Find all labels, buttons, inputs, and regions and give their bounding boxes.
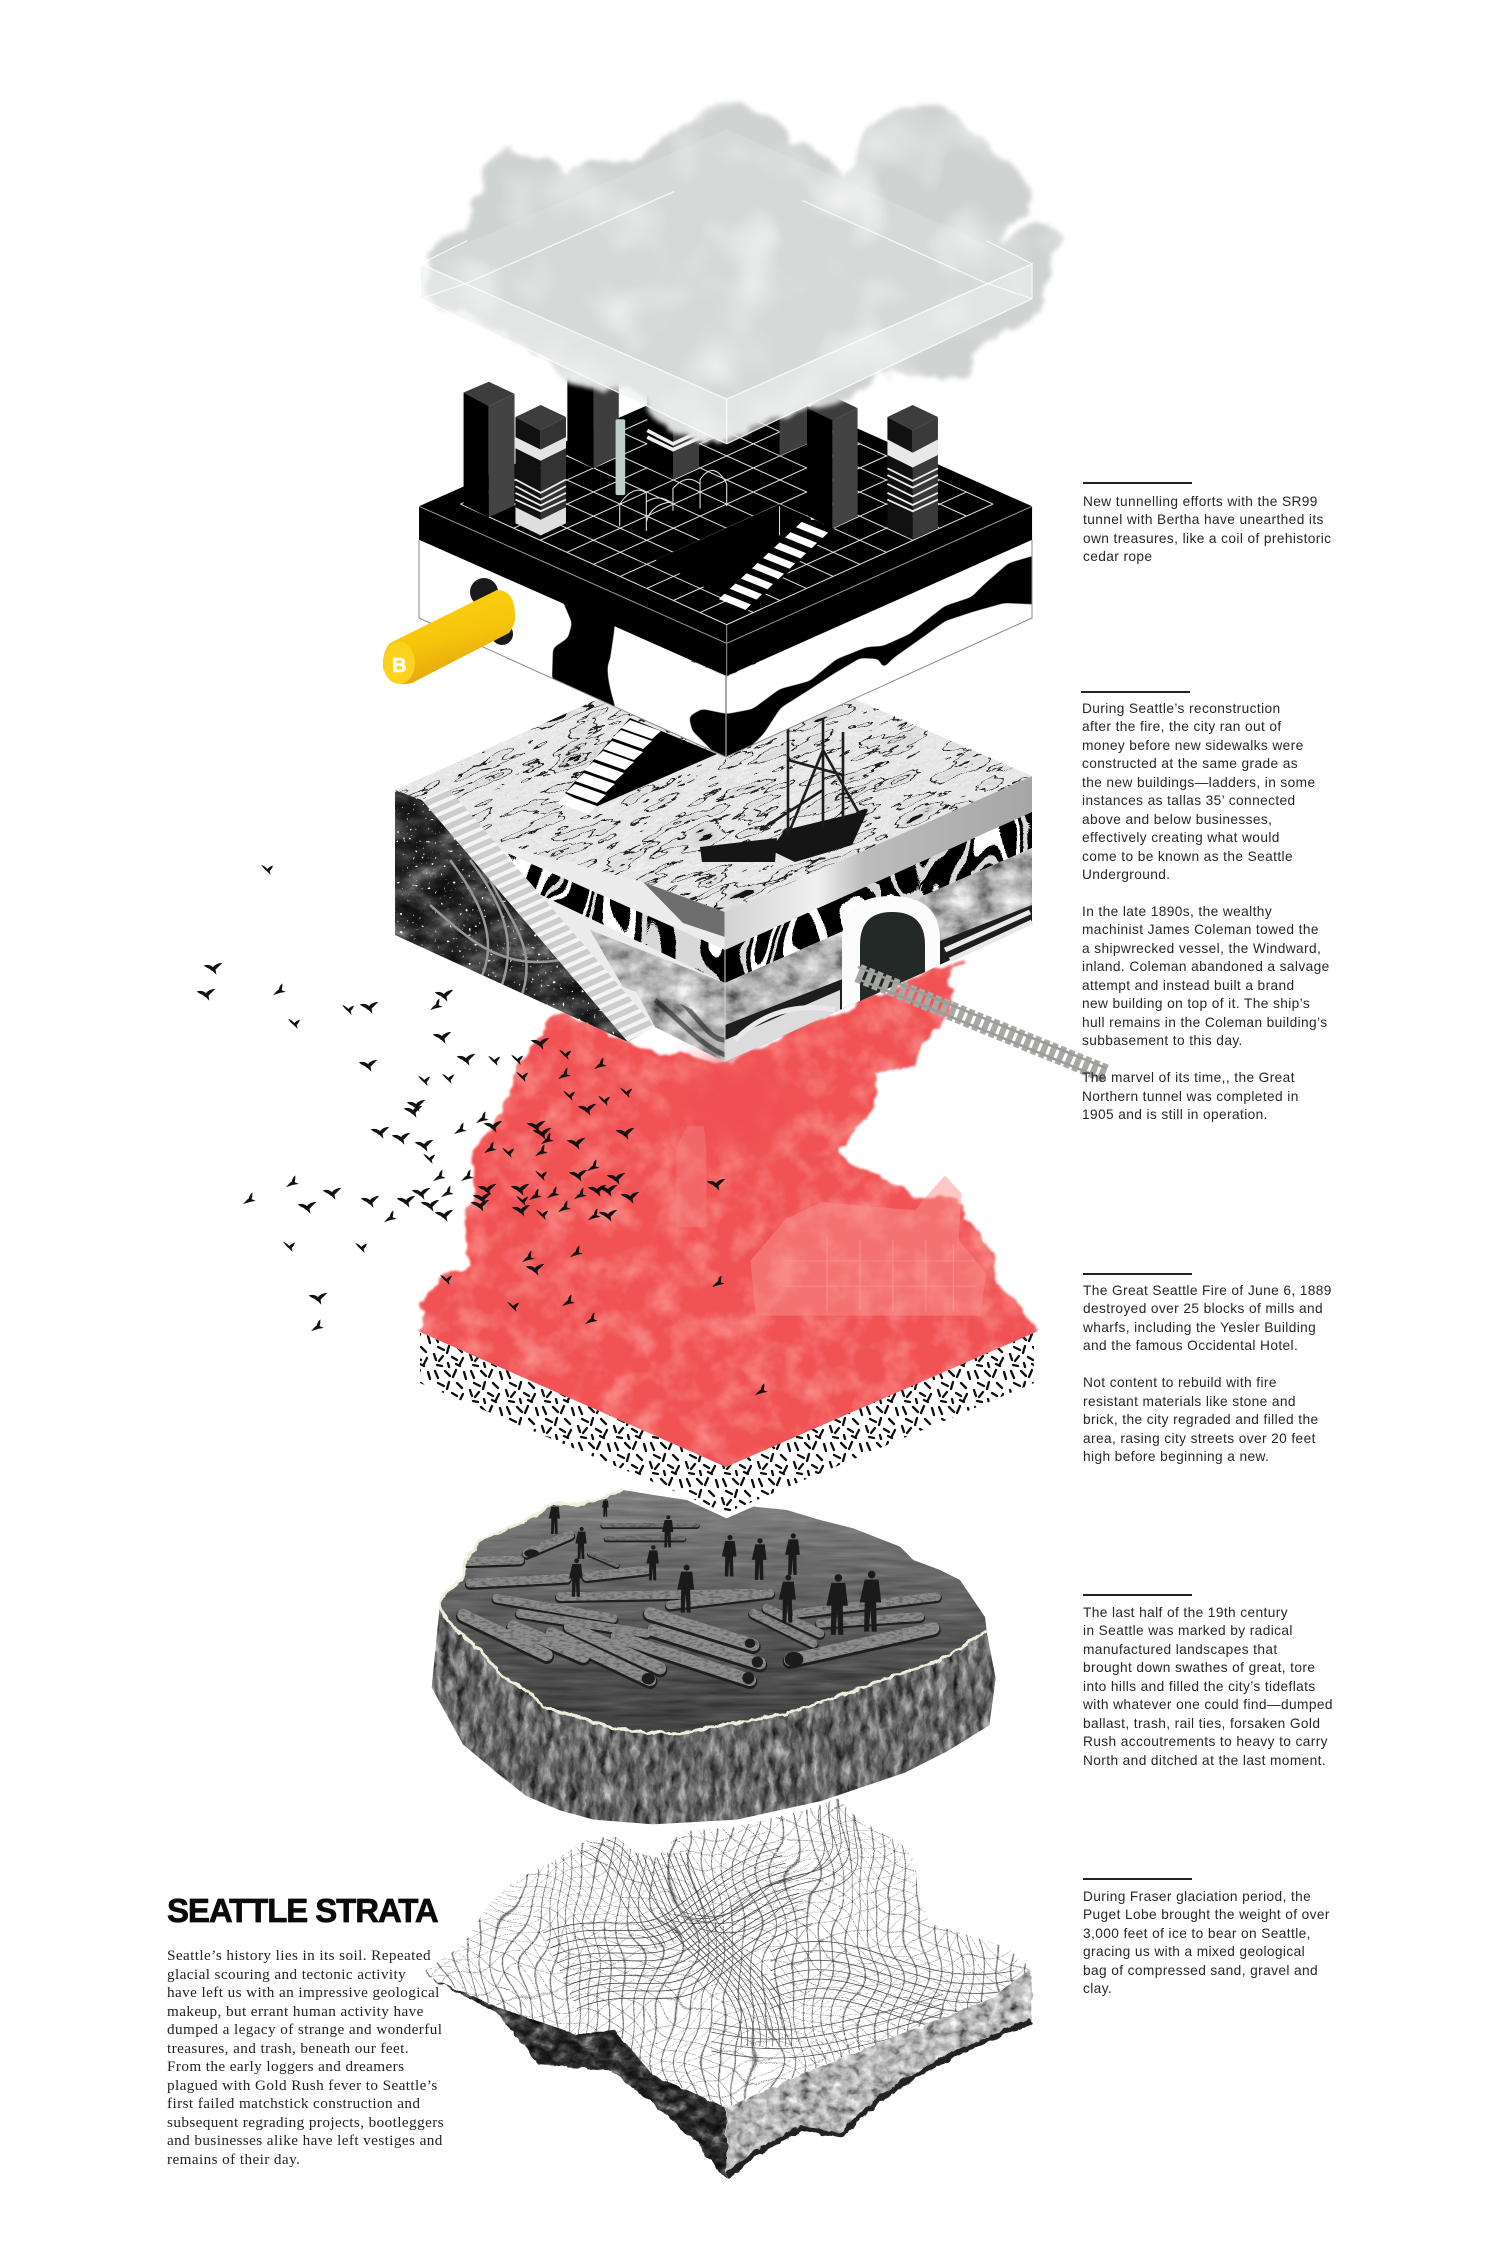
caption: Seattle Underground, Windward, Great Northern tunnel: attempt and instead built a brand: [1082, 978, 1295, 993]
caption: manufactured landscapes: manufactured landscapes that: [1083, 1642, 1278, 1657]
caption: Great Seattle Fire: resistant materials like stone and: [1083, 1394, 1296, 1409]
caption: SR99 tunnel: tunnel with Bertha have unearthed its: [1083, 512, 1324, 527]
caption: manufactured landscapes: ballast, trash, rail ties, forsaken Gold: [1083, 1716, 1320, 1731]
caption: Seattle Underground, Windward, Great Northern tunnel: instances as tallas 35’ connected: [1082, 793, 1296, 808]
caption: Fraser glaciation: clay.: [1083, 1981, 1112, 1996]
left zebra marble band: [504, 852, 724, 983]
log shadows: [463, 1526, 937, 1682]
caption: Great Seattle Fire: and the famous Occidental Hotel.: [1083, 1338, 1298, 1353]
caption: SR99 tunnel: cedar rope: [1083, 549, 1152, 564]
cloud mass: [420, 98, 1069, 444]
caption: Fraser glaciation: 3,000 feet of ice to bear on Seattle,: [1083, 1926, 1311, 1941]
caption rule: 19th century: [1083, 1594, 1192, 1596]
caption: Great Seattle Fire: brick, the city regraded and filled the: [1083, 1412, 1318, 1427]
raft logs: [463, 1525, 937, 1680]
caption: Seattle Underground, Windward, Great Northern tunnel: above and below businesses,: [1082, 812, 1272, 827]
tall left tower: [464, 382, 515, 517]
caption rule: fire: [1083, 1273, 1192, 1275]
title: SEATTLE STRATA: [167, 1892, 438, 1929]
water and log raft photo surface: [433, 1487, 993, 1740]
caption: Seattle Underground, Windward, Great Northern tunnel: In the late 1890s, the wealthy: [1082, 904, 1272, 919]
caption: Great Seattle Fire: [1083, 1283, 1332, 1464]
caption: Fraser glaciation: Puget Lobe brought the weight of over: [1083, 1907, 1330, 1922]
tunnel portal arch: [842, 896, 940, 1009]
caption: Seattle Underground, Windward, Great Northern tunnel: machinist James Coleman towed the: [1082, 922, 1319, 937]
layer: red smoke cloud: [416, 962, 1044, 1500]
ghosted buildings in smoke: [676, 1126, 986, 1316]
tunnel machine B mark: B: [392, 655, 406, 677]
right black seam: [690, 552, 1050, 764]
intro text block: [167, 1947, 444, 2168]
caption: Seattle Underground, Windward, Great Northern tunnel: subbasement to this day.: [1082, 1033, 1243, 1048]
ghost hotel: [750, 1175, 986, 1316]
left swirl band: [636, 992, 724, 1062]
caption: manufactured landscapes: in Seattle was marked by radical: [1083, 1623, 1293, 1638]
railway track: [858, 967, 1106, 1080]
smoke shape: [416, 962, 1044, 1500]
intro text block: subsequent regrading projects, bootleggers: [167, 2114, 444, 2130]
left dark marble face: [390, 785, 635, 1045]
intro text block: first failed matchstick construction and: [167, 2095, 420, 2112]
intro text block: From the early loggers and dreamers: [167, 2058, 404, 2075]
caption: Seattle Underground, Windward, Great Northern tunnel: hull remains in the Coleman building’s: [1082, 1015, 1327, 1030]
caption: Seattle Underground, Windward, Great Northern tunnel: Underground.: [1082, 867, 1171, 882]
caption: Seattle Underground, Windward, Great Northern tunnel: a shipwrecked vessel, the Windward,: [1082, 941, 1321, 956]
caption: Seattle Underground, Windward, Great Northern tunnel: The marvel of its time,, the Great: [1082, 1070, 1295, 1085]
caption: SR99 tunnel: [1083, 494, 1331, 564]
caption: Fraser glaciation: gracing us with a mixed geological: [1083, 1944, 1305, 1959]
layer: fire base dash pattern: [420, 1332, 1034, 1513]
caption: Great Seattle Fire: destroyed over 25 blocks of mills and: [1083, 1301, 1323, 1316]
caption: Great Seattle Fire: wharfs, including the Yesler Building: [1083, 1320, 1316, 1335]
caption: manufactured landscapes: Rush accoutrements to heavy to carry: [1083, 1734, 1328, 1749]
intro text block: glacial scouring and tectonic activity: [167, 1966, 406, 1982]
loggers standing on raft: [549, 1498, 881, 1635]
white street grid: [460, 384, 993, 625]
caption: SR99 tunnel: New tunnelling efforts with the SR99: [1083, 494, 1318, 509]
centre striped tower: [647, 388, 699, 480]
stair pit with white steps: [656, 504, 835, 611]
right dark swirl band: [725, 905, 1032, 1062]
left grey rock band: [590, 930, 724, 1024]
caption: Seattle Underground, Windward, Great Northern tunnel: new building on top of it. The ship’s: [1082, 996, 1310, 1011]
caption: Great Seattle Fire: high before beginning a new.: [1083, 1449, 1269, 1464]
shipwreck: [700, 718, 868, 862]
caption: Fraser glaciation: [1083, 1889, 1330, 1996]
stump bark side: [427, 1597, 1000, 1830]
glass pole: [616, 419, 625, 495]
underground arches: [620, 470, 727, 531]
striped right tower: [887, 405, 938, 540]
glass slab faces: [420, 129, 1032, 444]
back right low tower: [780, 388, 807, 456]
caption: manufactured landscapes: The last half of the 19th century: [1083, 1605, 1288, 1620]
terrain wireframe mesh surface: [422, 1798, 1030, 2108]
caption: Seattle Underground, Windward, Great Northern tunnel: come to be known as the Seattle: [1082, 849, 1293, 864]
caption: Seattle Underground, Windward, Great Northern tunnel: During Seattle’s reconstruction: [1082, 701, 1281, 716]
terrain left rock face: [430, 1977, 729, 2178]
caption: Seattle Underground, Windward, Great Northern tunnel: effectively creating what would: [1082, 830, 1280, 845]
caption: Great Seattle Fire: Not content to rebuild with fire: [1083, 1375, 1277, 1390]
layer: collage stone block: [395, 659, 1033, 1062]
intro text block: plagued with Gold Rush fever to Seattle’s: [167, 2076, 438, 2094]
left dark rock patch: [643, 882, 725, 937]
caption: Seattle Underground, Windward, Great Northern tunnel: 1905 and is still in operation.: [1082, 1107, 1268, 1122]
block white underside: [419, 540, 1050, 764]
black top slab: [419, 370, 1032, 676]
caption: SR99 tunnel: own treasures, like a coil of prehistoric: [1083, 531, 1331, 546]
intro text block: remains of their day.: [167, 2150, 300, 2168]
layer: glacial terrain: [422, 1798, 1034, 2179]
caption rule: underground: [1081, 691, 1190, 693]
caption: manufactured landscapes: North and ditched at the last moment.: [1083, 1753, 1326, 1768]
caption rule: tunnelling: [1083, 482, 1192, 484]
caption: Seattle Underground, Windward, Great Northern tunnel: after the fire, the city ran out of: [1082, 719, 1282, 734]
block centre edge: [724, 912, 726, 1062]
intro text block: have left us with an impressive geological: [167, 1984, 440, 2001]
back tall tower: [567, 366, 619, 468]
caption: Seattle Underground, Windward, Great Northern tunnel: the new buildings—ladders, in some: [1082, 775, 1315, 790]
caption: Seattle Underground, Windward, Great Northern tunnel: Northern tunnel was completed in: [1082, 1089, 1299, 1104]
layer: log raft stump: [427, 1487, 1000, 1830]
side staircase: [422, 788, 655, 1042]
layer: modern black city block: [383, 366, 1050, 764]
terrain rock faces: [413, 1961, 1036, 2183]
caption: manufactured landscapes: with whatever one could find—dumped: [1083, 1697, 1333, 1712]
flock of birds: [197, 865, 768, 1395]
intro text block: Seattle’s history lies in its soil. Repeated: [167, 1947, 431, 1964]
caption: Fraser glaciation: During Fraser glaciation period, the: [1083, 1889, 1311, 1904]
intro text block: and businesses alike have left vestiges and: [167, 2132, 443, 2149]
tall right tower: [807, 396, 858, 529]
caption: Seattle Underground, Windward, Great Northern tunnel: inland. Coleman abandoned a salvage: [1082, 959, 1330, 974]
black seams: [552, 552, 1050, 764]
stair pit with white steps: [557, 718, 717, 814]
towers: [464, 366, 938, 540]
striped left tower: [515, 405, 566, 535]
caption: manufactured landscapes: [1083, 1605, 1333, 1768]
right zebra band: [726, 812, 1032, 983]
caption: Fraser glaciation: bag of compressed sand, gravel and: [1083, 1963, 1318, 1978]
caption: manufactured landscapes: into hills and filled the city’s tideflats: [1083, 1679, 1316, 1694]
layer: cloud with atmosphere slab: [420, 98, 1069, 444]
right pale band: [725, 776, 1032, 950]
intro text block: treasures, and trash, beneath our feet.: [167, 2040, 409, 2056]
yellow tunnel boring machine: [383, 578, 515, 684]
intro text block: makeup, but errant human activity have: [167, 2002, 424, 2020]
ghost tower: [676, 1126, 706, 1227]
log butt ends: [524, 1549, 803, 1684]
pattern left face: [420, 1332, 726, 1513]
block top face with stone: [395, 659, 1032, 912]
caption: Seattle Underground, Windward, Great Northern tunnel: [1082, 701, 1330, 1122]
pattern right face: [726, 1332, 1034, 1513]
caption: Great Seattle Fire: The Great Seattle Fire of June 6, 1889: [1083, 1283, 1332, 1298]
caption rule: glaciation: [1083, 1878, 1192, 1880]
intro text block: dumped a legacy of strange and wonderful: [167, 2021, 442, 2038]
caption: Great Seattle Fire: area, rasing city streets over 20 feet: [1083, 1431, 1316, 1446]
plain dark smoke centre: [680, 1057, 790, 1153]
terrain right rock face: [724, 1961, 1036, 2183]
right grey rock band: [725, 848, 1032, 1025]
caption: manufactured landscapes: brought down swathes of great, tore: [1083, 1660, 1315, 1675]
caption: Seattle Underground, Windward, Great Northern tunnel: constructed at the same grade as: [1082, 756, 1298, 771]
left pale backing of right-of-stairs bands: [448, 788, 725, 1062]
left black seam: [552, 604, 615, 706]
caption: Seattle Underground, Windward, Great Northern tunnel: money before new sidewalks were: [1082, 738, 1304, 753]
stump cream rim: [440, 1490, 987, 1733]
